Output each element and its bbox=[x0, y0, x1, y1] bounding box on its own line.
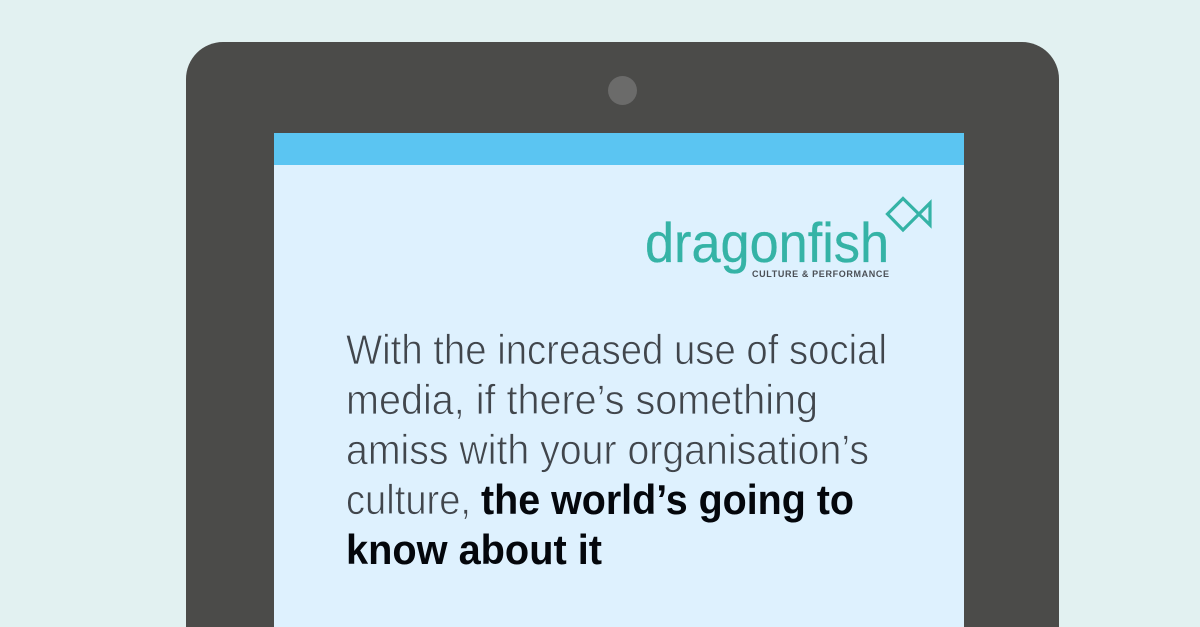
logo: dragonfish bbox=[645, 198, 930, 279]
icon: fish bbox=[888, 198, 930, 230]
tablet device bbox=[186, 42, 1059, 627]
text line 3: amiss with your organisation’s bbox=[346, 426, 869, 473]
text line 2: media, if there’s something bbox=[346, 376, 818, 423]
text line 5 bold: know about it bbox=[346, 526, 602, 573]
logo tagline: CULTURE & PERFORMANCE bbox=[752, 269, 889, 279]
text line 4 regular: culture, bbox=[346, 476, 471, 523]
tablet body bbox=[186, 42, 1059, 627]
text line 4 bold: the world’s going to bbox=[481, 476, 854, 523]
logo wordmark: dragonfish bbox=[645, 211, 889, 274]
main statement text bbox=[346, 326, 887, 573]
screen bbox=[274, 133, 964, 627]
text line 1: With the increased use of social bbox=[346, 326, 887, 373]
icon: camera bbox=[608, 76, 637, 105]
screen top bar bbox=[274, 133, 964, 165]
